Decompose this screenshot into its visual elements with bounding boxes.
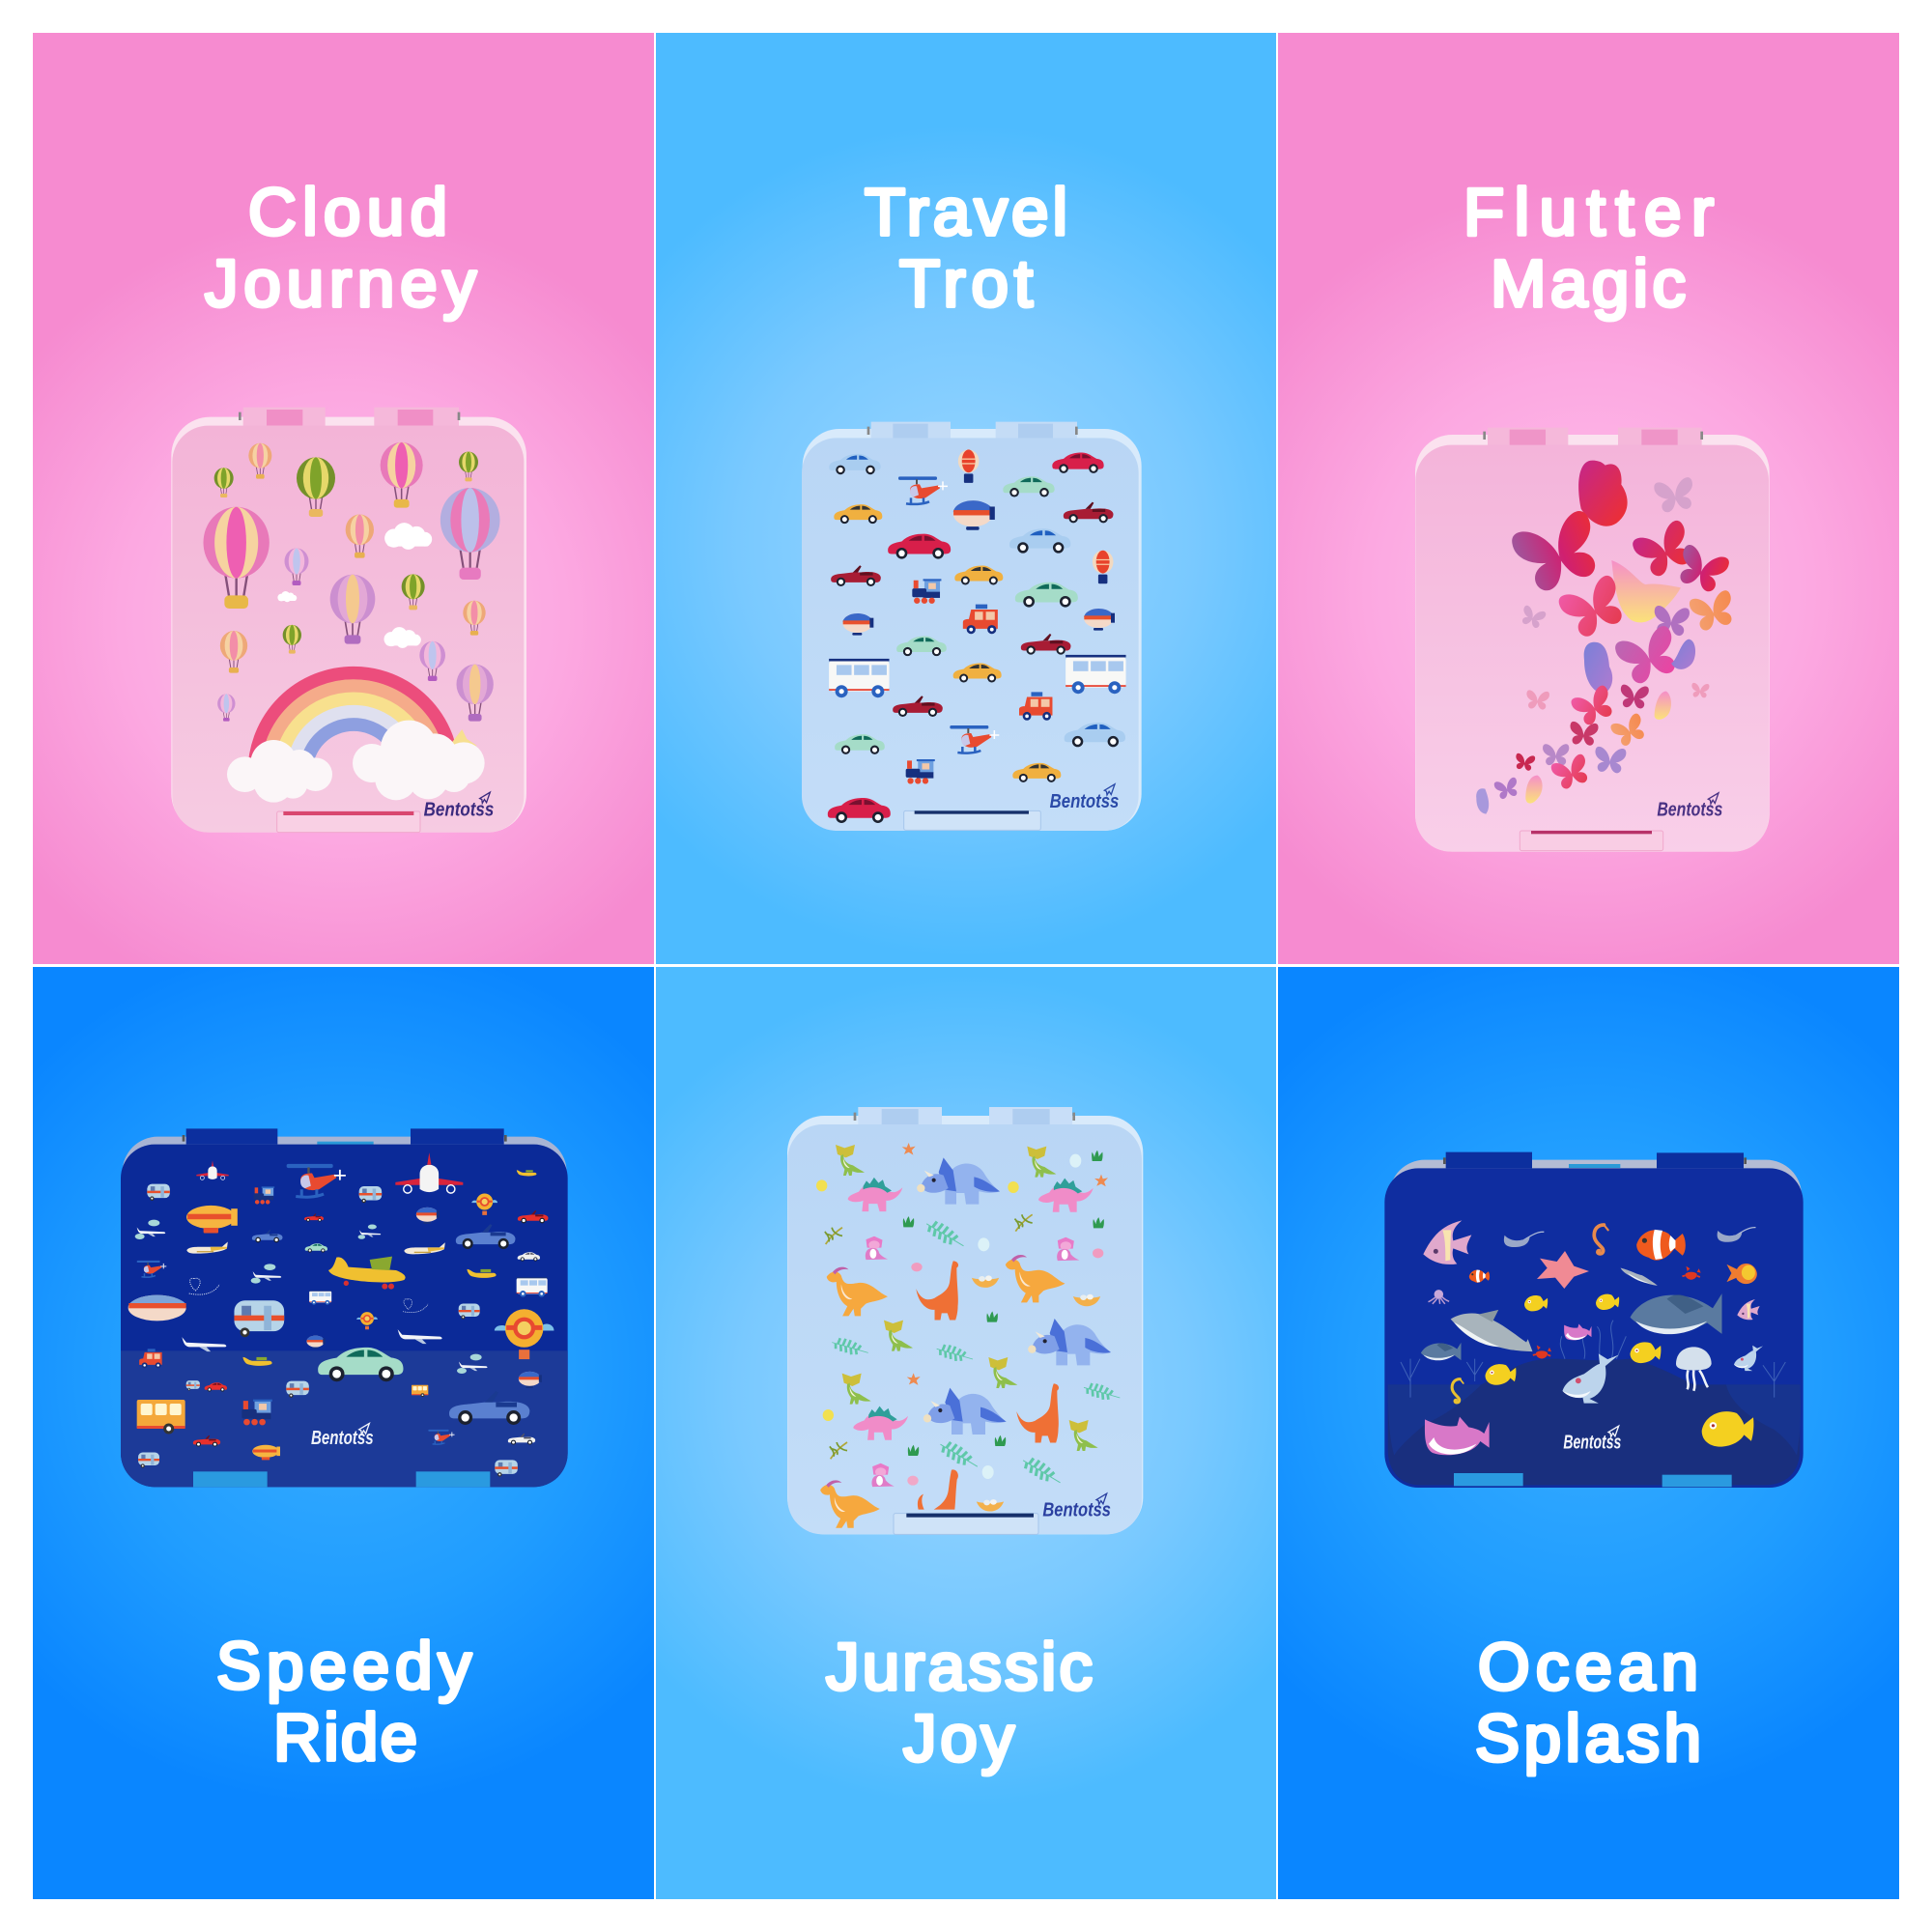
latch	[1520, 831, 1663, 851]
rainbow	[254, 673, 453, 772]
title: Cloud Journey: Journey	[205, 246, 477, 321]
logo: Bentotss: Bentotss	[1657, 799, 1722, 820]
sea creatures	[1421, 1220, 1763, 1455]
title: Ocean Splash: Ocean	[1478, 1630, 1698, 1704]
hot-air balloons	[203, 442, 499, 722]
logo: Bentotss	[1042, 1493, 1111, 1520]
logo: Bentotss	[311, 1423, 374, 1449]
logo: Bentotss	[1563, 1426, 1621, 1453]
partial long-neck dinosaur	[918, 1469, 958, 1510]
title: Speedy Ride: Speedy	[216, 1629, 471, 1703]
title: Travel Trot: Travel	[865, 175, 1067, 249]
panel: Flutter Magic	[1278, 33, 1899, 964]
logo: Bentotss: Bentotss	[1563, 1432, 1621, 1453]
logo: Bentotss	[1050, 784, 1119, 812]
title: Speedy Ride: Ride	[273, 1700, 417, 1775]
lunch box: navy with sea creatures	[1384, 1152, 1804, 1488]
butterflies	[1476, 461, 1738, 814]
lunch box: navy with transport	[121, 1128, 568, 1487]
title: Cloud Journey: Cloud	[248, 175, 447, 249]
title: Jurassic Joy: Jurassic	[826, 1630, 1093, 1704]
panel: Jurassic Joy	[656, 967, 1276, 1899]
title: Ocean Splash: Splash	[1475, 1701, 1701, 1776]
eggs	[816, 1154, 1103, 1486]
panel: Ocean Splash	[1278, 967, 1899, 1899]
icon: large blimp	[128, 1295, 186, 1321]
icon: yellow biplane	[328, 1257, 406, 1290]
dinosaur pattern	[816, 1143, 1120, 1528]
title: Flutter Magic: Magic	[1491, 246, 1686, 321]
seabed hills	[1388, 1359, 1800, 1485]
latch	[894, 1514, 1038, 1534]
vehicles pattern	[828, 449, 1126, 823]
logo: Bentotss: Bentotss	[424, 799, 494, 820]
lunch box: pink with butterflies	[1415, 428, 1770, 852]
coral and seaweed	[1401, 1321, 1785, 1398]
title: Travel Trot: Trot	[899, 246, 1033, 321]
transport pattern	[128, 1152, 554, 1477]
panel: Cloud Journey	[33, 33, 654, 964]
lunch box: pink with balloons and rainbow	[171, 408, 526, 833]
panel: Speedy Ride	[33, 967, 654, 1899]
icon: large caravan	[234, 1300, 284, 1337]
logo: Bentotss: Bentotss	[1050, 791, 1119, 812]
latch	[277, 811, 420, 833]
lunch box: light blue with vehicles	[802, 422, 1142, 831]
logo: Bentotss: Bentotss	[1042, 1499, 1111, 1520]
logo: Bentotss	[1657, 793, 1722, 820]
lunch box: light blue with dinosaurs	[787, 1107, 1143, 1534]
title: Flutter Magic: Flutter	[1463, 175, 1714, 249]
rainbow clouds and star	[227, 721, 485, 803]
latch	[904, 810, 1040, 830]
logo: Bentotss: Bentotss	[311, 1428, 374, 1449]
logo: Bentotss	[424, 792, 494, 820]
small clouds	[277, 523, 432, 648]
panel: Travel Trot	[656, 33, 1276, 964]
title: Jurassic Joy: Joy	[903, 1701, 1014, 1776]
